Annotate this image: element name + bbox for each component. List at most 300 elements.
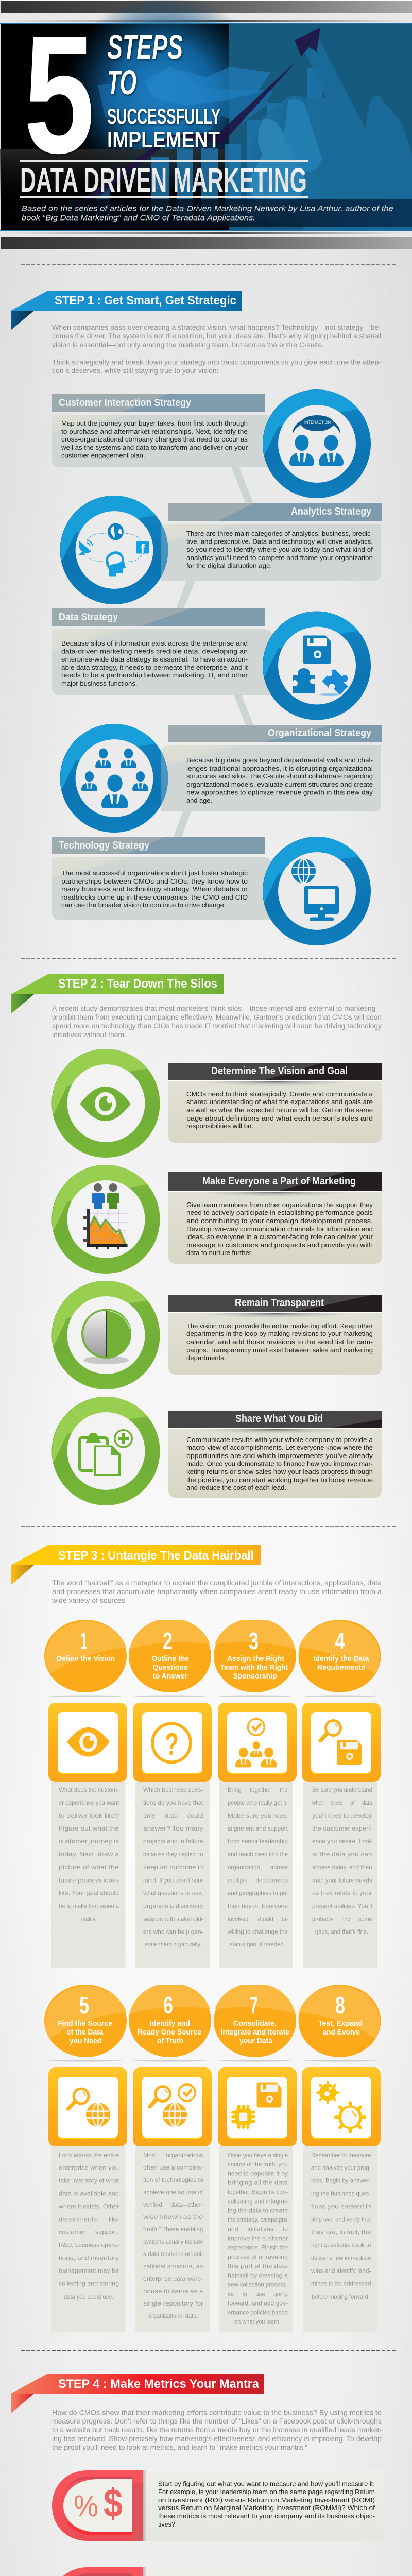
text block: new approaches to optimize revenue growth in this new day (186, 789, 373, 796)
step 1 intro: comes the driver. The system is not the solution, but your ideas are. That’s why aligning behind a shared (52, 332, 381, 340)
text block: future process looks (59, 1876, 119, 1884)
text block: access today, and then (312, 1863, 372, 1871)
text block: and initiatives to (228, 2226, 288, 2233)
number orb: Outline the (151, 1654, 189, 1663)
number orb: 5 (79, 1992, 89, 2019)
text block: For example, is your leadership team on the same page regarding Return (158, 2488, 375, 2496)
step 1 intro: vision is essential—not only among the marketing team, but across the entire C-suite. (52, 341, 324, 349)
number orb: Team with the Right (220, 1663, 288, 1672)
text block: wins and identify land- (311, 2267, 371, 2274)
text block (58, 2151, 119, 2300)
text block: “truth.” These enabling (143, 2226, 203, 2233)
number orb (44, 1985, 127, 2057)
text block: keep an outcome in (143, 1863, 203, 1871)
text block: house to serve as a (143, 2287, 203, 2295)
title words: STEPS (107, 28, 183, 66)
text block: achieve one source of (143, 2189, 203, 2196)
number orb: and Evolve (322, 2028, 360, 2037)
text block: departments in the loop by making revisions to your marketing (186, 1330, 373, 1337)
text block: willing to challenge the (227, 1928, 288, 1935)
number orb: 8 (335, 1992, 345, 2019)
icon: organization people (60, 724, 168, 833)
icon: analytics network: f (141, 542, 145, 556)
connectors between strategies (174, 467, 253, 837)
text block: Bring together the (228, 1786, 288, 1793)
text block: organize a discovery (143, 1902, 203, 1909)
text block: reality. (81, 1916, 97, 1923)
text block: and reduce the cost of each lead. (186, 1484, 286, 1492)
number orb (44, 1620, 127, 1692)
text block: deliver a few immediate (311, 2255, 371, 2262)
text block: versus Return on Marginal Marketing Investment (ROMMI)? Which of (158, 2504, 375, 2512)
icon: question and hat (52, 2567, 143, 2576)
number orb: Questions (152, 1663, 187, 1672)
text block: er experience you want (59, 1799, 119, 1806)
text block: responsibilities will be. (186, 1123, 253, 1130)
text block: cross-organizational company changes that need to occur as (61, 436, 248, 443)
heading (168, 1063, 382, 1081)
text block: There are three main categories of analytics: business, predic- (186, 530, 373, 537)
text block: alignment and support (228, 1825, 288, 1832)
text block: marry business and technology strategy. When debates or (61, 886, 248, 893)
text block: right questions. Look to (311, 2241, 371, 2248)
number orb (129, 1618, 211, 1692)
text block: message to customers and prospects and provide you with (186, 1242, 373, 1249)
header (0, 0, 412, 249)
text block: new collection process- (228, 2281, 288, 2289)
icon card: question (133, 1703, 212, 1782)
heading: Determine The Vision and Goal (211, 1065, 348, 1077)
text block: solidating and integrat- (228, 2198, 288, 2205)
heading: Share What You Did (235, 1413, 323, 1425)
heading: Make Everyone a Part of Marketing (202, 1176, 356, 1187)
icon card: data and chip (218, 2067, 297, 2146)
text block: ers who can help gen- (143, 1928, 203, 1935)
text block: Be sure you understand (312, 1786, 372, 1793)
subtitle: book “Big Data Marketing” and CMO of Teradata Applications. (22, 213, 255, 223)
icon card: team check (218, 1703, 297, 1782)
text block: projects end in failure (143, 1838, 203, 1845)
text block: only data could (143, 1812, 203, 1819)
text block: process of unraveling (228, 2253, 288, 2261)
text block: mind. If you aren’t sure (143, 1876, 203, 1884)
text block: today. Next, draw a (59, 1851, 119, 1858)
step 3 intro: The word “hairball” as a metaphor to explain the complicated jumble of interactions, applications, data (52, 1579, 382, 1587)
text block: so you need to identify where you are today and what kind of (186, 546, 373, 553)
number orb: of Truth (157, 2037, 183, 2045)
text block: ernance policies based (228, 2309, 288, 2316)
text block: they are, in fact, the (311, 2229, 371, 2236)
text block: at the data you can (312, 1851, 372, 1858)
text block: forward, and add gov- (228, 2300, 288, 2307)
number orb: 7 (250, 1992, 258, 2019)
number orb: Integrate and Iterate (220, 2028, 289, 2037)
text block: data is available and (59, 2190, 119, 2197)
text block: source of the truth, you (228, 2161, 288, 2168)
text block: Start by figuring out what you want to measure and how you’ll measure it. (158, 2480, 375, 2487)
text block: picture of what the (59, 1863, 119, 1871)
number orb: of the Data (66, 2028, 104, 2037)
text block: tive, and prescriptive. Data and technology will drive analytics, (186, 538, 373, 545)
text block: the customer experi- (312, 1825, 372, 1832)
text block: departments. (186, 1354, 226, 1362)
step 4 ribbon (11, 2374, 264, 2413)
text block: a data model or organi- (143, 2250, 203, 2258)
icon: eye (52, 1049, 160, 1158)
heading (52, 837, 265, 854)
text block: enterprise-wide data strategy is essential. To have an action- (61, 656, 248, 663)
text block: Map out the journey your buyer takes, from first touch through (61, 420, 248, 427)
text block: customer support, (59, 2229, 119, 2236)
text block: experience. Finish the (228, 2244, 288, 2251)
number orb: you Need (70, 2037, 101, 2045)
icon: percent and dollar (52, 2470, 143, 2541)
step 2 intro: prohibit them from executing campaigns effectively. Meanwhile, Gartner’s prediction that CMOs will soon (52, 1013, 382, 1021)
text block: customer engagement plan. (61, 452, 145, 460)
text block: CMOs need to think strategically. Create and communicate a (186, 1091, 373, 1098)
step 3 item 3 (214, 1618, 297, 1948)
heading (168, 1172, 382, 1192)
step 4 intro: measure progress. Don’t refer to things like the number of “Likes” on a Facebook post or click-throughs (52, 2417, 382, 2425)
text block: ress. Begin by answer- (311, 2177, 371, 2184)
text block: map your future needs (312, 1876, 372, 1884)
panel: stay focused (52, 2567, 327, 2576)
text block: data-driven marketing needs credible data, developing an (61, 648, 248, 655)
subtitle: Based on the series of articles for the Data-Driven Marketing Network by Lisa Arthur, author of the (22, 204, 393, 213)
icon card: gears (302, 2067, 381, 2146)
text block: macro-view of accomplishments. Let everyone know where the (186, 1444, 373, 1451)
text block (168, 1077, 382, 1143)
text block: be to make that vision a (59, 1902, 119, 1909)
step 3 item 8 (299, 1985, 381, 2300)
step 1 intro: When companies pass over creating a strategic vision, what happens? Technology—not strategy—be- (52, 324, 381, 331)
text block: shared understanding of what the expectations and goals are (186, 1098, 373, 1106)
text block: bringing all the data (228, 2179, 288, 2187)
text block: take inventory of what (59, 2177, 119, 2184)
text block: the strategy, campaigns (228, 2216, 288, 2224)
text block: Once you have a single (228, 2151, 288, 2159)
number orb: Consolidate, (233, 2019, 277, 2028)
text block: page about definitions and what each person’s roles and (186, 1115, 373, 1122)
text block: tions, and inventory (59, 2255, 119, 2262)
title words: SUCCESSFULLY (107, 104, 220, 128)
panel: measure (52, 2470, 384, 2541)
step 4 intro: to a website but track results, like the returns from a media buy or the increase in qualified leads market- (52, 2426, 382, 2434)
text block: structures and silos. The C-suite should collaborate regarding (186, 773, 373, 780)
text block: like. Your goal should (59, 1890, 119, 1897)
text block: their buy in. Everyone (228, 1902, 288, 1909)
step 3 item 4 (299, 1620, 381, 1935)
step 3 intro: and processes that accumulate haphazardly when companies aren’t ready to use information from a (52, 1588, 382, 1596)
text block: Develop two-way communication channels for information and (186, 1226, 373, 1233)
text block: probably find some (312, 1916, 372, 1923)
step 4 intro: ing has received. Show precisely how marketing’s effectiveness and efficiency is improving. To develop (52, 2435, 382, 2443)
number orb: Assign the Right (227, 1654, 284, 1663)
text block: Most organizations (143, 2151, 203, 2159)
step 3 intro (52, 1579, 382, 1604)
text block: What does the custom- (59, 1786, 119, 1793)
text block: roadblocks come up in these companies, the CMO and CIO (61, 894, 248, 901)
orb shadow (133, 2060, 207, 2062)
text block: organizational data. (148, 2312, 198, 2319)
number orb: your Data (239, 2037, 273, 2045)
subtitle (22, 204, 393, 223)
step 3 item 6 (129, 1983, 212, 2319)
number orb (129, 1983, 211, 2057)
heading (168, 503, 382, 521)
text block: systems usually include (143, 2238, 203, 2245)
divider (21, 2350, 396, 2351)
step 1 intro (52, 324, 381, 375)
text block: on Investment (ROI) versus Return on Marketing Investment (ROMI) (158, 2497, 375, 2504)
text block: es to use going (228, 2291, 288, 2298)
text block: departments, like (59, 2215, 119, 2223)
text block: single repository for (143, 2300, 203, 2307)
text block: Look across the entire (59, 2151, 119, 2159)
number orb (299, 1985, 381, 2057)
text block: need to populate it by (228, 2170, 288, 2177)
step 1 intro: tion it deserves, while still staying true to your vision: (52, 367, 218, 375)
text block: paigns. Transparency must exist between sales and marketing (186, 1347, 373, 1354)
text block: verified data—other- (143, 2201, 203, 2208)
text block: this part of the data (228, 2263, 288, 2270)
number orb: Identify the Data (313, 1654, 369, 1663)
panel: share what you did (52, 1397, 382, 1505)
text block: step two, and verify that (311, 2215, 371, 2223)
number orb: 1 (80, 1628, 88, 1654)
heading: Technology Strategy (59, 840, 150, 851)
text block (143, 1786, 203, 1948)
icon card: eye (48, 1703, 127, 1782)
text block: ence you desire. Look (312, 1838, 372, 1845)
panel: data strategy (52, 608, 371, 720)
icon: half and half (52, 1281, 160, 1389)
icon card: question: ? (165, 1727, 179, 1762)
text block: what types of data (312, 1799, 372, 1806)
text block: on what you learn. (234, 2318, 281, 2326)
text block: needs to be a partnership between marketing, IT, and other (61, 672, 248, 679)
text block (52, 857, 273, 920)
orb shadow (303, 2060, 377, 2062)
text block (311, 2151, 371, 2300)
text block: for the digital disruption age. (186, 563, 272, 570)
text block: and contributing to your campaign development process. (186, 1217, 373, 1225)
text block (168, 1187, 382, 1264)
number orb: 4 (335, 1628, 345, 1654)
text block: made. Once you demonstrate to finance how you improve mar- (186, 1460, 373, 1467)
text block: status quo, if needed. (230, 1941, 285, 1948)
icon: percent and dollar: $ (104, 2480, 123, 2526)
panel: customer interaction strategy (52, 389, 371, 498)
text block: because they neglect to (143, 1851, 203, 1858)
text block (228, 2151, 288, 2326)
text block: keting returns or show sales how your leads progress through (186, 1468, 373, 1476)
text block (312, 1786, 372, 1935)
text block (52, 629, 273, 695)
text block: erate them organically. (145, 1941, 201, 1948)
text block: ing the data to create (228, 2207, 288, 2214)
step 1 intro: Think strategically and break down your strategy into basic components so you give each one the atten- (52, 359, 381, 366)
panel: analytics strategy (60, 496, 382, 604)
panel: make everyone a part of marketing (52, 1165, 382, 1274)
step 4 intro (52, 2409, 382, 2451)
step 4 intro: How do CMOs show that their marketing efforts contribute value to the business? By using metrics to (52, 2409, 382, 2416)
text block (143, 2151, 203, 2319)
text block: Remember to measure (311, 2151, 371, 2159)
text block: analytics you’ll need to compete and frame your organization (186, 554, 373, 562)
text block (143, 2567, 327, 2576)
orb shadow (218, 2060, 292, 2062)
step 2 ribbon (11, 974, 224, 1014)
text block: Which business ques- (143, 1786, 203, 1793)
text block: lenges traditional approaches, it is disrupting organizational (186, 765, 373, 772)
text block: tion of technologies to (143, 2176, 203, 2183)
icon card: find web (48, 2067, 127, 2146)
text block: and age. (186, 797, 212, 804)
text block: present abilities. You’ll (312, 1902, 372, 1909)
heading: Customer Interaction Strategy (59, 397, 192, 409)
text block: gaps, and that’s fine. (315, 1928, 368, 1935)
text block (161, 524, 381, 581)
text block: involved should be (228, 1916, 288, 1923)
step 2 intro (52, 1005, 382, 1039)
number orb: Ready One Source (138, 2028, 201, 2037)
icon: interaction (263, 389, 371, 498)
heading (52, 608, 265, 626)
text block: can use the broader vision to continue to drive change (61, 902, 224, 909)
step 2 intro: A recent study demonstrates that most marketers think silos – those internal and external to marketing – (52, 1005, 382, 1012)
text block: data you could use. (64, 2293, 113, 2300)
text block (168, 1309, 382, 1375)
heading (52, 394, 265, 412)
orb shadow (48, 2060, 123, 2062)
step 2 intro: spend more on technology than CIOs has made IT worried that marketing will soon be driving technology (52, 1022, 382, 1030)
orb shadow (48, 1695, 123, 1697)
title words (107, 28, 220, 152)
text block: Because silos of information exist across the enterprise and (61, 640, 248, 647)
title words: TO (107, 63, 136, 102)
divider (21, 1526, 396, 1527)
step 3 ribbon: STEP 3 : Untangle The Data Hairball (58, 1549, 254, 1563)
number orb: to Answer (153, 1672, 187, 1681)
text block: to purchase and aftermarket relationships. Next, identify the (61, 428, 248, 435)
text block (168, 1425, 382, 1498)
icon: people on chart (52, 1165, 160, 1274)
heading: Data Strategy (59, 612, 118, 623)
number orb: 3 (249, 1628, 259, 1654)
icon: percent and dollar: % (74, 2489, 98, 2523)
step 3 ribbon (11, 1545, 261, 1585)
text block: enterprise data ware- (143, 2275, 203, 2282)
number orb: Define the Vision (57, 1654, 115, 1663)
hero image: map, chart and hand (0, 0, 412, 231)
title words: IMPLEMENT (107, 127, 220, 152)
orb shadow (218, 1695, 292, 1697)
text block: Make sure you have (228, 1812, 288, 1819)
text block: the pipeline, you can start working together to boost revenue (186, 1477, 373, 1484)
text block: need to actively participate in establishing performance goals (186, 1209, 373, 1216)
text block: zational structure, an (143, 2263, 203, 2270)
text block: tives? (158, 2521, 175, 2528)
text block: The vision must pervade the entire marketing effort. Keep other (186, 1323, 373, 1330)
text block: improve the customer (228, 2235, 288, 2242)
panel: technology strategy (52, 837, 371, 945)
number orb: Requirements (317, 1663, 365, 1672)
text block: R&D, business opera- (59, 2241, 119, 2248)
text block: The most successful organizations don’t just foster strategic (61, 870, 248, 877)
text block: and analyze your prog- (311, 2164, 371, 2171)
text block (59, 1786, 119, 1923)
text block (161, 745, 381, 811)
number orb (214, 1983, 296, 2057)
text block: organizational models, evaluate current structures and create (186, 781, 373, 788)
number orb: 6 (163, 1992, 173, 2019)
number orb (214, 1618, 296, 1692)
text block: major business functions. (61, 680, 137, 687)
step 2 intro: initiatives without them. (52, 1031, 126, 1039)
text block: organization, across (228, 1863, 288, 1871)
step 4 intro: the proof you’ll need to look at metrics, and learn to “make metrics your mantra.” (52, 2444, 307, 2451)
icon: analytics network (60, 496, 168, 604)
step 3 item 1 (44, 1620, 127, 1923)
icon card: verify web (133, 2067, 212, 2146)
text block: ing the business ques- (311, 2190, 371, 2197)
text block: Give team members from other organizations the support they (186, 1201, 373, 1209)
text block: collecting and storing (59, 2280, 119, 2287)
text block: where it exists. Other (58, 2203, 119, 2210)
text block: from senior leadership (228, 1838, 288, 1845)
heading: Analytics Strategy (291, 506, 372, 517)
step 3 intro: wide variety of sources. (52, 1597, 127, 1604)
text block: together. Begin by con- (228, 2189, 288, 2196)
text block: Because big data goes beyond departmental walls and chal- (186, 757, 373, 764)
heading (168, 725, 382, 742)
text block (227, 1786, 288, 1948)
step 1 ribbon: STEP 1 : Get Smart, Get Strategic (55, 294, 236, 308)
divider (21, 958, 396, 959)
text block: and reach deep into the (228, 1851, 288, 1858)
step 1 ribbon (11, 291, 242, 330)
text block: and geographies to get (228, 1890, 288, 1897)
text block: Communicate results with your whole company to provide a (186, 1436, 373, 1444)
text block: as well as what the expected returns will be. Get on the same (186, 1107, 373, 1114)
text block: you’ll need to develop (312, 1812, 372, 1819)
icon card: find data (302, 1703, 381, 1782)
text block: customer journey is (59, 1838, 119, 1845)
panel: remain transparent (52, 1281, 382, 1389)
icon: data (263, 611, 371, 720)
text block (52, 415, 273, 467)
text block: as they relate to your (312, 1890, 372, 1897)
orb shadow (133, 1695, 207, 1697)
text block: calendar, and add those revisions to the seed list for cam- (186, 1338, 373, 1346)
text block: session with stakehold- (143, 1916, 203, 1923)
text block: before moving forward. (312, 2293, 370, 2300)
heading: Organizational Strategy (268, 727, 372, 739)
text panels background (52, 1782, 377, 2333)
text block: these metrics is most relevant to your company and its business objec- (158, 2513, 375, 2520)
big numeral 5: 5 (24, 1, 95, 189)
text block: ideas, so everyone in a customer-facing role can deliver your (186, 1233, 373, 1241)
step 2 ribbon: STEP 2 : Tear Down The Silos (58, 977, 217, 991)
text block: enterprise when you (59, 2164, 119, 2171)
number orb: Test, Expand (318, 2019, 363, 2028)
text block: data to nurture further. (186, 1249, 253, 1257)
text block: management may be (59, 2267, 119, 2274)
heading: Remain Transparent (235, 1297, 324, 1309)
heading (168, 1295, 382, 1313)
text block: to deliver look like? (59, 1812, 119, 1819)
